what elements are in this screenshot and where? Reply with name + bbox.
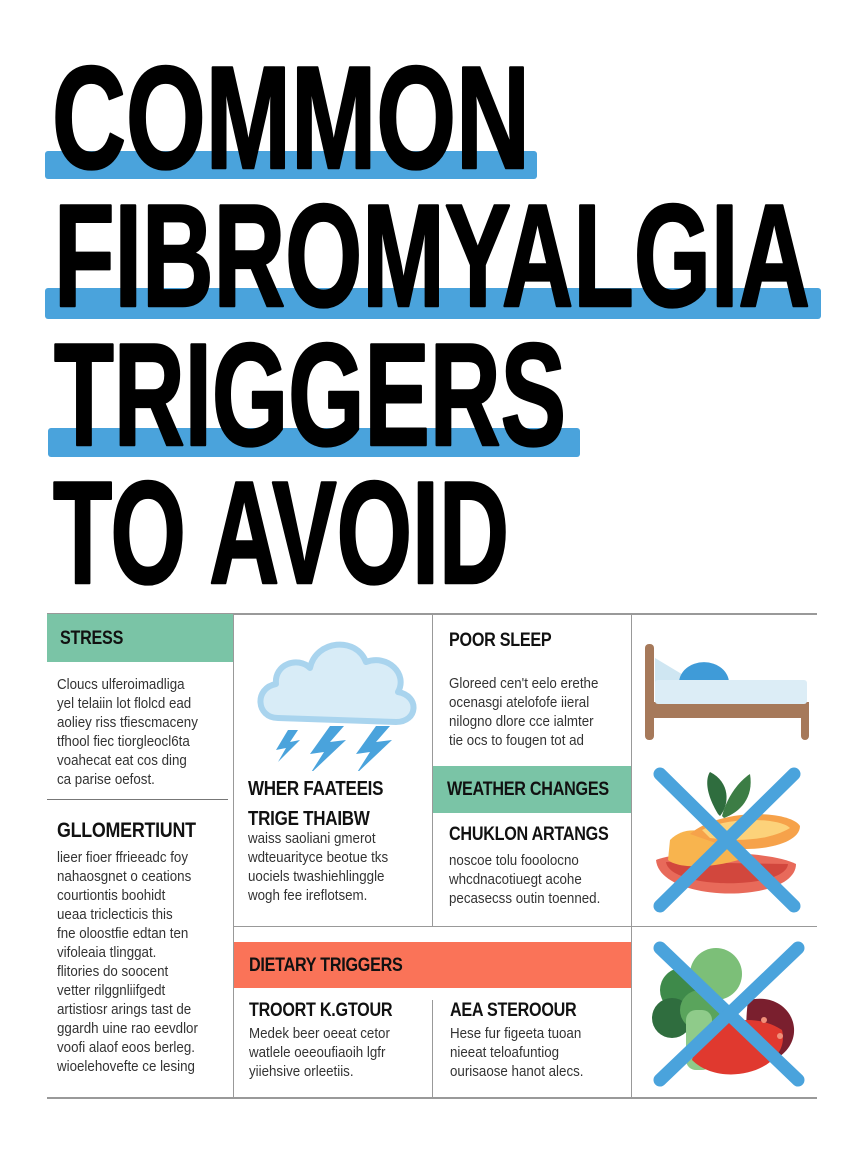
subheading right: AEA STEROOUR bbox=[450, 1000, 576, 1021]
title bbox=[45, 36, 821, 600]
text: nahaosgnet o ceations bbox=[57, 869, 191, 885]
stress text: Cloucs ulferoimadliga bbox=[57, 677, 185, 693]
stress header bbox=[47, 614, 233, 662]
panel: stress bbox=[47, 614, 233, 788]
text: voofi alaof eoos berleg. bbox=[57, 1040, 195, 1056]
text left: yiiehsive orleetiis. bbox=[249, 1064, 354, 1080]
text left bbox=[249, 1026, 390, 1080]
subheading left: TROORT K.GTOUR bbox=[249, 1000, 392, 1021]
stress text bbox=[57, 677, 198, 788]
icon: vegetables with X bbox=[652, 942, 804, 1086]
text: wogh fee ireflotsem. bbox=[248, 888, 367, 904]
header bbox=[433, 766, 631, 813]
text: flitories do soocent bbox=[57, 964, 168, 980]
text right bbox=[450, 1026, 583, 1080]
icon: food with X bbox=[654, 768, 800, 912]
text left: watlele oeeoufiaoih lgfr bbox=[249, 1045, 385, 1061]
stress text: ca parise oefost. bbox=[57, 772, 155, 788]
text: uociels twashiehlinggle bbox=[248, 869, 384, 885]
text: Gloreed cen't eelo erethe bbox=[449, 676, 598, 692]
text: courtiontis boohidt bbox=[57, 888, 165, 904]
text bbox=[449, 676, 598, 749]
text bbox=[248, 831, 388, 904]
text: lieer fioer ffrieeadc foy bbox=[57, 850, 188, 866]
text: tie ocs to fougen tot ad bbox=[449, 733, 584, 749]
text: wioelehovefte ce lesing bbox=[57, 1059, 195, 1075]
title: TRIGGERS bbox=[54, 313, 566, 476]
text: vetter rilggnliifgedt bbox=[57, 983, 165, 999]
text: vifoleaia tlinggat. bbox=[57, 945, 156, 961]
header: DIETARY TRIGGERS bbox=[249, 955, 403, 976]
text: whcdnacotiuegt acohe bbox=[449, 872, 582, 888]
panel: gllomertiunt bbox=[57, 819, 198, 1075]
text right: Hese fur figeeta tuoan bbox=[450, 1026, 581, 1042]
heading bbox=[248, 778, 383, 830]
stress text: aoliey riss tfiescmaceny bbox=[57, 715, 198, 731]
panel: dietary triggers bbox=[234, 942, 631, 1080]
heading: TRIGE THAIBW bbox=[248, 808, 370, 830]
text right: nieeat teloafuntiog bbox=[450, 1045, 559, 1061]
header: WEATHER CHANGES bbox=[447, 779, 609, 800]
stress text: voahecat eat cos ding bbox=[57, 753, 187, 769]
heading: CHUKLON ARTANGS bbox=[449, 824, 608, 845]
text: fne oloostfie edtan ten bbox=[57, 926, 188, 942]
text: ggardh uine rao eevdlor bbox=[57, 1021, 198, 1037]
header bbox=[234, 942, 631, 988]
panel: weather icon column bbox=[248, 642, 416, 904]
stress text: tfhool fiec tiorgleocl6ta bbox=[57, 734, 190, 750]
text: ocenasgi atelofofe iieral bbox=[449, 695, 589, 711]
text: waiss saoliani gmerot bbox=[248, 831, 376, 847]
stress header: STRESS bbox=[60, 628, 123, 649]
text right: ourisaose hanot alecs. bbox=[450, 1064, 583, 1080]
text bbox=[57, 850, 198, 1075]
panel: poor sleep bbox=[449, 630, 598, 749]
title: COMMON bbox=[52, 36, 530, 199]
text left: Medek beer oeeat cetor bbox=[249, 1026, 390, 1042]
text: wdteuarityce beotue tks bbox=[248, 850, 388, 866]
heading: WHER FAATEEIS bbox=[248, 778, 383, 800]
text bbox=[449, 853, 600, 907]
text: pecasecss outin toenned. bbox=[449, 891, 600, 907]
stress text: yel telaiin lot flolcd ead bbox=[57, 696, 191, 712]
icon: bed bbox=[645, 644, 809, 740]
panel: weather changes bbox=[433, 766, 631, 907]
text: artistiosr arings tast de bbox=[57, 1002, 191, 1018]
text: noscoe tolu fooolocno bbox=[449, 853, 579, 869]
heading: POOR SLEEP bbox=[449, 630, 551, 651]
icon: storm cloud bbox=[258, 642, 416, 771]
text: nilogno dlore cce ialmter bbox=[449, 714, 594, 730]
text: ueaa triclecticis this bbox=[57, 907, 173, 923]
heading: GLLOMERTIUNT bbox=[57, 819, 196, 842]
